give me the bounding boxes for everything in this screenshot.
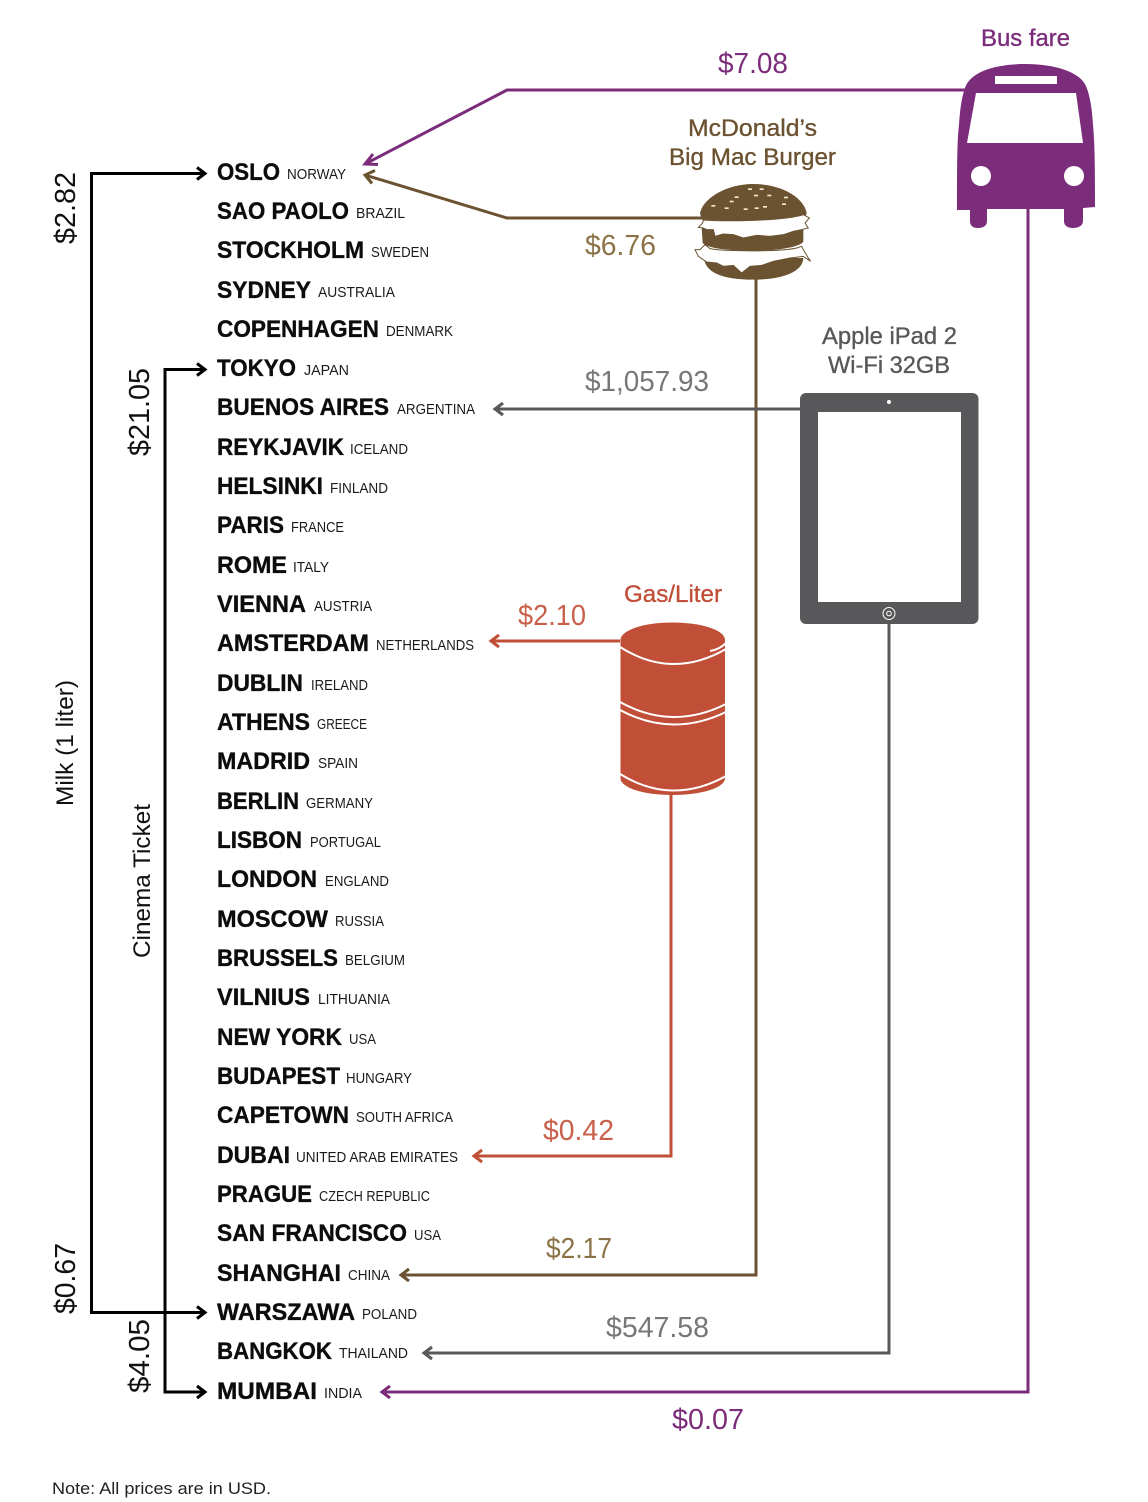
bus fare connector arrows — [365, 90, 1028, 1398]
city list: TOKYO — [217, 355, 296, 382]
price: burger high: $6.76 — [585, 230, 656, 262]
city list: ATHENS — [217, 709, 310, 736]
icon: burger — [695, 184, 811, 280]
burger connector arrows — [365, 170, 756, 1281]
price: bus low: $0.07 — [672, 1404, 744, 1436]
city list: BELGIUM — [345, 952, 405, 969]
city list: SWEDEN — [371, 244, 429, 261]
city list: LITHUANIA — [318, 991, 390, 1008]
city list: USA — [349, 1031, 376, 1048]
city list: INDIA — [324, 1385, 362, 1402]
burger title: McDonald’s — [688, 115, 817, 142]
milk labels — [50, 172, 82, 1314]
city list: LISBON — [217, 827, 302, 854]
bus fare title: Bus fare — [981, 25, 1070, 52]
milk labels: $0.67 — [50, 1243, 82, 1314]
ipad title: Apple iPad 2 — [822, 323, 957, 350]
city list: AMSTERDAM — [217, 630, 369, 657]
city list: MUMBAI — [217, 1378, 317, 1405]
price: ipad high: $1,057.93 — [585, 366, 709, 398]
city list: USA — [414, 1227, 441, 1244]
burger title — [669, 115, 836, 171]
city list: PARIS — [217, 512, 284, 539]
city list — [217, 159, 475, 1405]
price: burger low: $2.17 — [546, 1233, 612, 1265]
city list: SHANGHAI — [217, 1260, 341, 1287]
milk labels: Milk (1 liter) — [52, 680, 79, 806]
city list: THAILAND — [339, 1345, 408, 1362]
price: ipad low: $547.58 — [606, 1312, 709, 1344]
city list: REYKJAVIK — [217, 434, 345, 461]
city list: SAO PAOLO — [217, 198, 349, 225]
city list: SAN FRANCISCO — [217, 1220, 407, 1247]
city list: JAPAN — [304, 362, 349, 379]
city list: PORTUGAL — [310, 834, 381, 851]
price: gas low: $0.42 — [543, 1115, 614, 1147]
city list: PRAGUE — [217, 1181, 312, 1208]
city list: OSLO — [217, 159, 280, 186]
city list: BRAZIL — [356, 205, 405, 222]
city list: FRANCE — [291, 519, 344, 536]
city list: NORWAY — [287, 166, 346, 183]
city list: NETHERLANDS — [376, 637, 474, 654]
city list: GERMANY — [306, 795, 373, 812]
city list: CAPETOWN — [217, 1102, 349, 1129]
gas connector arrows — [474, 635, 671, 1162]
city list: STOCKHOLM — [217, 237, 364, 264]
cinema bracket arrow — [165, 364, 205, 1398]
city list: ICELAND — [350, 441, 408, 458]
city list: BERLIN — [217, 788, 299, 815]
city list: MADRID — [217, 748, 310, 775]
city list: DUBAI — [217, 1142, 290, 1169]
city list: ENGLAND — [325, 873, 389, 890]
city list: BRUSSELS — [217, 945, 338, 972]
milk labels: $2.82 — [50, 172, 82, 244]
city list: NEW YORK — [217, 1024, 343, 1051]
city list: COPENHAGEN — [217, 316, 379, 343]
city list: CHINA — [348, 1267, 390, 1284]
city list: SPAIN — [318, 755, 358, 772]
ipad connector arrows — [424, 403, 889, 1359]
price: bus high: $7.08 — [718, 48, 788, 80]
city list: LONDON — [217, 866, 317, 893]
icon: ipad — [800, 393, 978, 624]
city list: RUSSIA — [335, 913, 384, 930]
city list: SOUTH AFRICA — [356, 1109, 453, 1126]
city list: BUDAPEST — [217, 1063, 340, 1090]
city list: ARGENTINA — [397, 401, 475, 418]
cinema labels — [124, 368, 156, 1393]
milk bracket arrow — [92, 168, 205, 1318]
city list: ITALY — [293, 559, 329, 576]
city list: GREECE — [317, 716, 367, 733]
city list: HUNGARY — [346, 1070, 412, 1087]
icon: gas barrel — [620, 622, 726, 795]
cinema labels: Cinema Ticket — [129, 804, 156, 958]
city list: DUBLIN — [217, 670, 303, 697]
cinema labels: $4.05 — [124, 1319, 156, 1393]
price: gas high: $2.10 — [518, 600, 586, 632]
city list: DENMARK — [386, 323, 453, 340]
burger title: Big Mac Burger — [669, 144, 836, 171]
city list: VILNIUS — [217, 984, 310, 1011]
cinema labels: $21.05 — [124, 368, 156, 456]
city list: IRELAND — [311, 677, 368, 694]
city list: ROME — [217, 552, 287, 579]
ipad title: Wi-Fi 32GB — [828, 352, 950, 379]
icon: bus — [957, 64, 1095, 228]
city list: FINLAND — [330, 480, 388, 497]
city list: POLAND — [362, 1306, 417, 1323]
city list: MOSCOW — [217, 906, 328, 933]
city list: BANGKOK — [217, 1338, 333, 1365]
city list: AUSTRIA — [314, 598, 372, 615]
city list: BUENOS AIRES — [217, 394, 389, 421]
gas title: Gas/Liter — [624, 581, 722, 608]
city list: WARSZAWA — [217, 1299, 355, 1326]
ipad title — [822, 323, 957, 379]
city list: VIENNA — [217, 591, 306, 618]
city list: SYDNEY — [217, 277, 311, 304]
footnote: Note: All prices are in USD. — [52, 1479, 271, 1498]
city list: HELSINKI — [217, 473, 323, 500]
city list: CZECH REPUBLIC — [319, 1188, 430, 1205]
city list: UNITED ARAB EMIRATES — [296, 1149, 458, 1166]
city list: AUSTRALIA — [318, 284, 395, 301]
